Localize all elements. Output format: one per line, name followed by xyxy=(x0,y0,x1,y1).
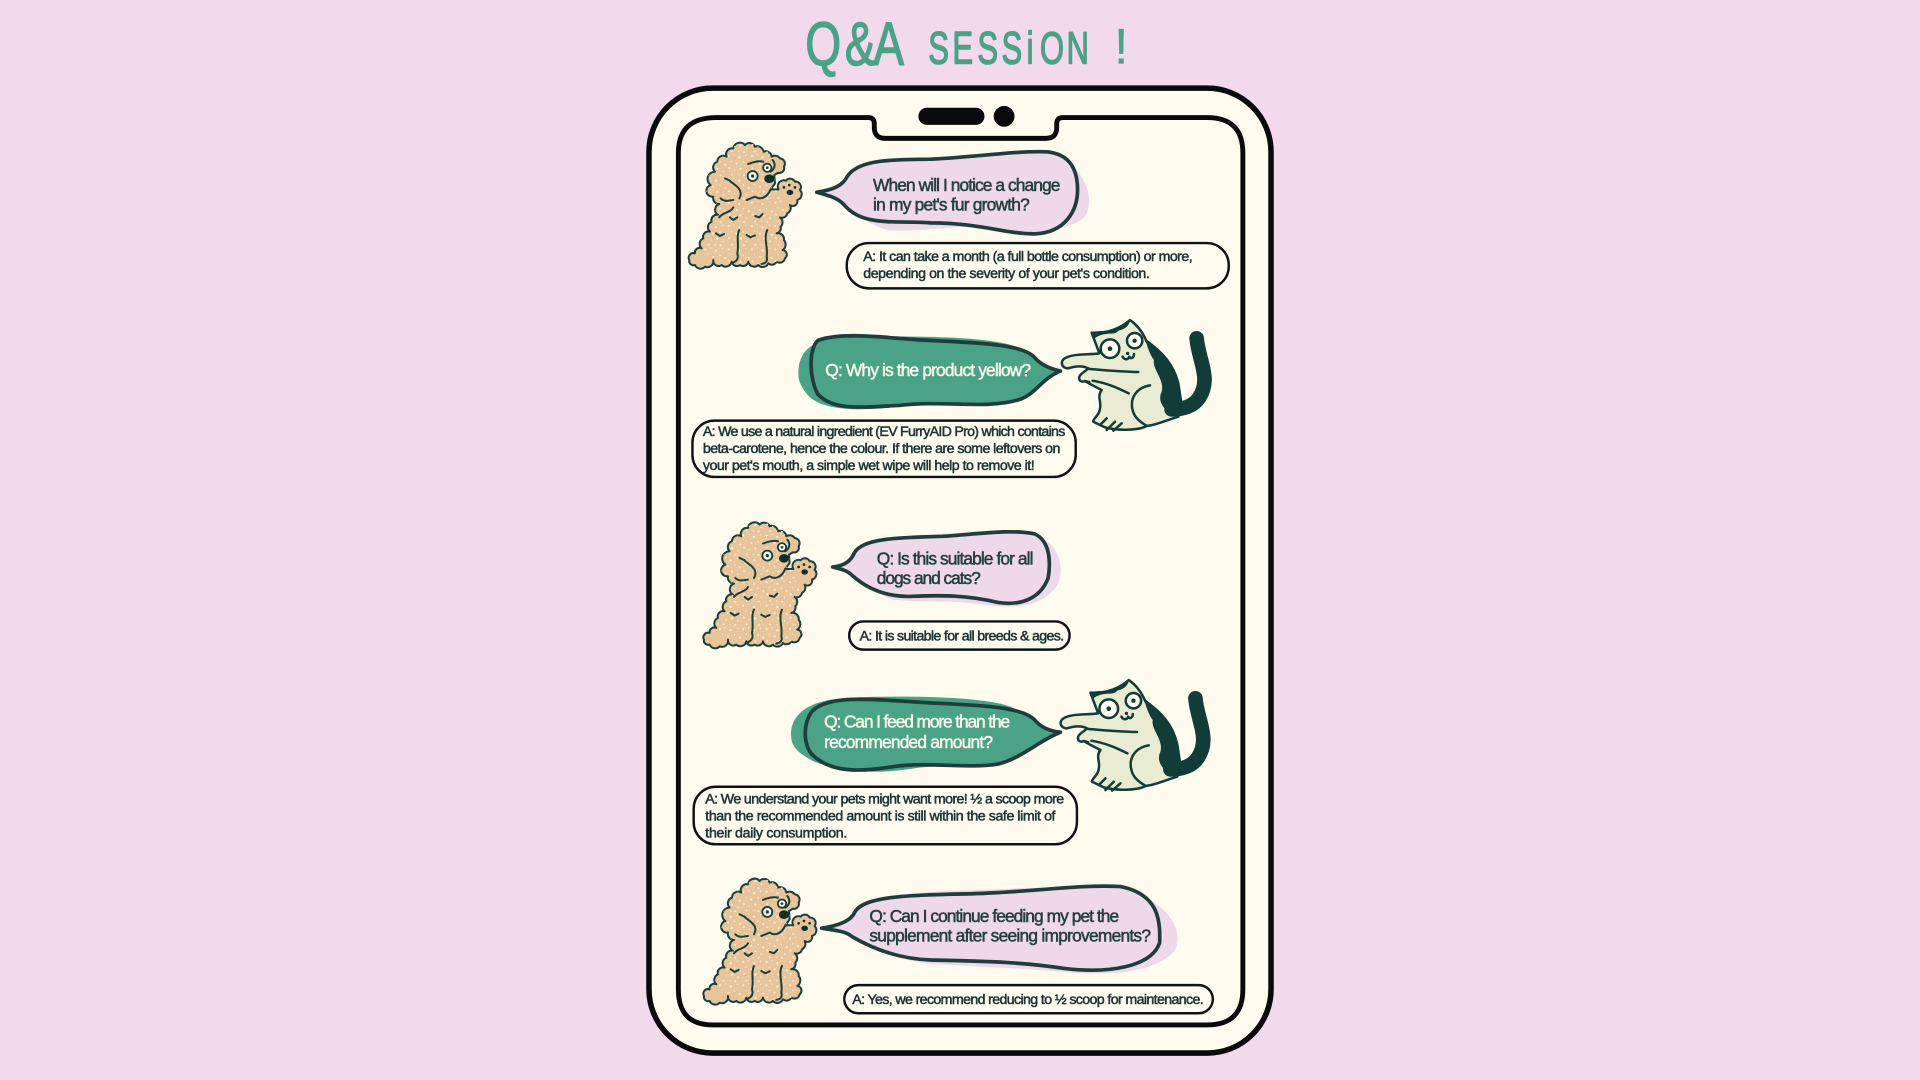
answer 4 xyxy=(694,787,1077,844)
speech bubble: continued feeding question: Q: Can I continue feeding my pet the xyxy=(869,906,1119,926)
phone camera xyxy=(994,106,1014,127)
panel: question 4 xyxy=(694,680,1203,844)
speech bubble: yellow product question: Q: Why is the product yellow? xyxy=(825,360,1031,380)
speech bubble: fur growth question: When will I notice a change xyxy=(873,175,1060,195)
panel: question 1 xyxy=(689,143,1229,288)
speech bubble: fur growth question: in my pet's fur growth? xyxy=(873,195,1030,215)
title: ! xyxy=(1114,19,1128,75)
speech bubble: fur growth question xyxy=(817,152,1089,234)
speech bubble: yellow product question xyxy=(798,336,1060,409)
answer 2: A: We use a natural ingredient (EV FurryAID Pro) which contains xyxy=(703,424,1065,440)
answer 1: A: It can take a month (a full bottle consumption) or more, xyxy=(863,249,1193,265)
speech bubble: feeding amount question: recommended amount? xyxy=(824,732,993,752)
title xyxy=(805,11,1128,78)
speech bubble: feeding amount question xyxy=(791,697,1060,772)
speech bubble: continued feeding question: supplement after seeing improvements? xyxy=(869,926,1151,946)
answer 5: A: Yes, we recommend reducing to ½ scoop for maintenance. xyxy=(852,992,1204,1008)
answer 2 xyxy=(692,421,1076,477)
answer 1: depending on the severity of your pet's condition. xyxy=(863,266,1150,282)
answer 3: A: It is suitable for all breeds & ages. xyxy=(860,628,1064,644)
panel: question 2 xyxy=(692,320,1205,477)
icon: cat xyxy=(1062,320,1205,431)
panel: question 5 xyxy=(703,879,1213,1013)
speech bubble: suitability question: Q: Is this suitable for all xyxy=(877,548,1033,568)
speech bubble: suitability question: dogs and cats? xyxy=(877,568,981,588)
icon: dog xyxy=(703,522,816,648)
icon: cat xyxy=(1061,680,1203,791)
answer 2: beta-carotene, hence the colour. If there are some leftovers on xyxy=(703,441,1060,457)
speech bubble: feeding amount question: Q: Can I feed more than the xyxy=(824,711,1010,731)
answer 4: A: We understand your pets might want more! ½ a scoop more xyxy=(705,791,1064,807)
answer 4: their daily consumption. xyxy=(705,826,847,842)
speech bubble: suitability question xyxy=(833,532,1061,607)
phone frame xyxy=(649,88,1271,1053)
answer 4: than the recommended amount is still within the safe limit of xyxy=(705,808,1056,824)
title: Q&A xyxy=(805,11,904,78)
answer 1 xyxy=(847,243,1229,288)
phone speaker pill xyxy=(918,108,984,125)
icon: dog xyxy=(703,879,816,1005)
answer 3 xyxy=(849,621,1070,650)
panel: question 3 xyxy=(703,522,1070,650)
title: SESSiON xyxy=(928,24,1089,74)
speech bubble: continued feeding question xyxy=(822,886,1178,974)
answer 2: your pet's mouth, a simple wet wipe will help to remove it! xyxy=(703,458,1035,474)
icon: dog xyxy=(689,143,802,269)
answer 5 xyxy=(844,985,1213,1013)
